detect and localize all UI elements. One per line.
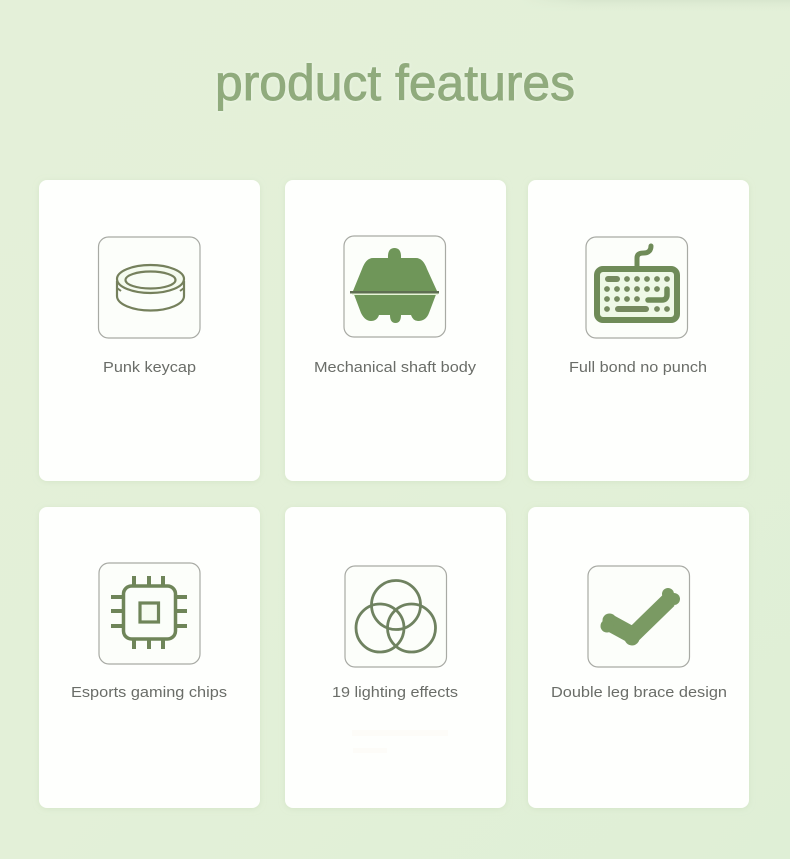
label: 19 lighting effects: 19 lighting effects bbox=[332, 684, 458, 701]
label: punk keycap: Punk keycap bbox=[103, 359, 196, 376]
panel: esports gaming chips bbox=[39, 507, 260, 808]
label: mechanical shaft body: Mechanical shaft body bbox=[314, 359, 477, 376]
panel: mechanical shaft body bbox=[285, 180, 506, 481]
title: product features bbox=[215, 55, 575, 111]
label: full bond no punch: Full bond no punch bbox=[569, 359, 707, 376]
panel: 19 lighting effects bbox=[285, 507, 506, 808]
panel: double leg brace design bbox=[528, 507, 749, 808]
icon: chip bbox=[99, 563, 200, 664]
panel: punk keycap bbox=[39, 180, 260, 481]
icon: keycap bbox=[98, 237, 200, 338]
icon: bone check bbox=[588, 566, 690, 667]
icon: keyboard bbox=[586, 237, 688, 338]
label: esports gaming chips: Esports gaming chips bbox=[71, 684, 227, 701]
icon: shaft body bbox=[344, 236, 446, 337]
label: double leg brace design: Double leg brace design bbox=[551, 684, 727, 701]
icon: overlapping circles bbox=[345, 566, 446, 667]
panel: full bond no punch bbox=[528, 180, 749, 481]
faint smudge bbox=[352, 730, 448, 753]
